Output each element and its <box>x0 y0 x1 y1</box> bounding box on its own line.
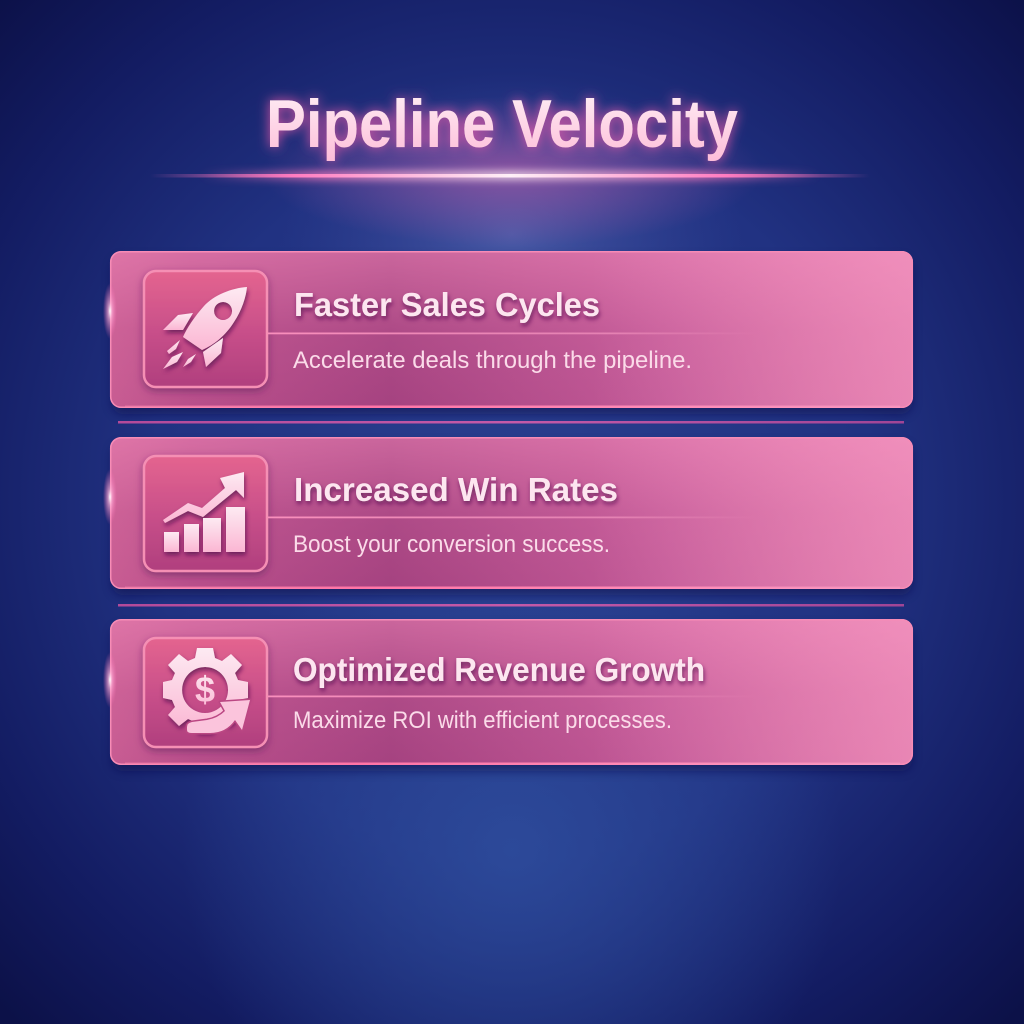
panel: increased win rates <box>103 437 913 595</box>
separator <box>118 604 904 606</box>
description: Accelerate deals through the pipeline. <box>293 347 692 374</box>
heading: Increased Win Rates <box>294 471 618 508</box>
arrow hand <box>187 700 250 733</box>
left edge flare <box>103 283 117 339</box>
left edge flare <box>103 652 117 708</box>
title underline glow <box>150 171 870 180</box>
panel: optimized revenue growth <box>103 619 913 771</box>
heading: Optimized Revenue Growth <box>293 651 705 688</box>
panel: faster sales cycles <box>103 251 913 414</box>
dollar sign: $ <box>195 669 215 710</box>
icon box: rocket <box>144 271 267 387</box>
title: Pipeline Velocity <box>266 86 738 162</box>
icon box: gear <box>144 638 267 747</box>
heading: Faster Sales Cycles <box>294 286 600 323</box>
icon: rocket <box>163 287 247 369</box>
icon box: chart <box>144 456 267 571</box>
description: Maximize ROI with efficient processes. <box>293 707 672 734</box>
divider <box>268 516 758 518</box>
separator <box>118 421 904 424</box>
left edge flare <box>103 469 117 525</box>
divider <box>268 696 758 697</box>
description: Boost your conversion success. <box>293 531 610 558</box>
icon: rising bar chart <box>163 472 245 552</box>
divider <box>268 332 758 334</box>
